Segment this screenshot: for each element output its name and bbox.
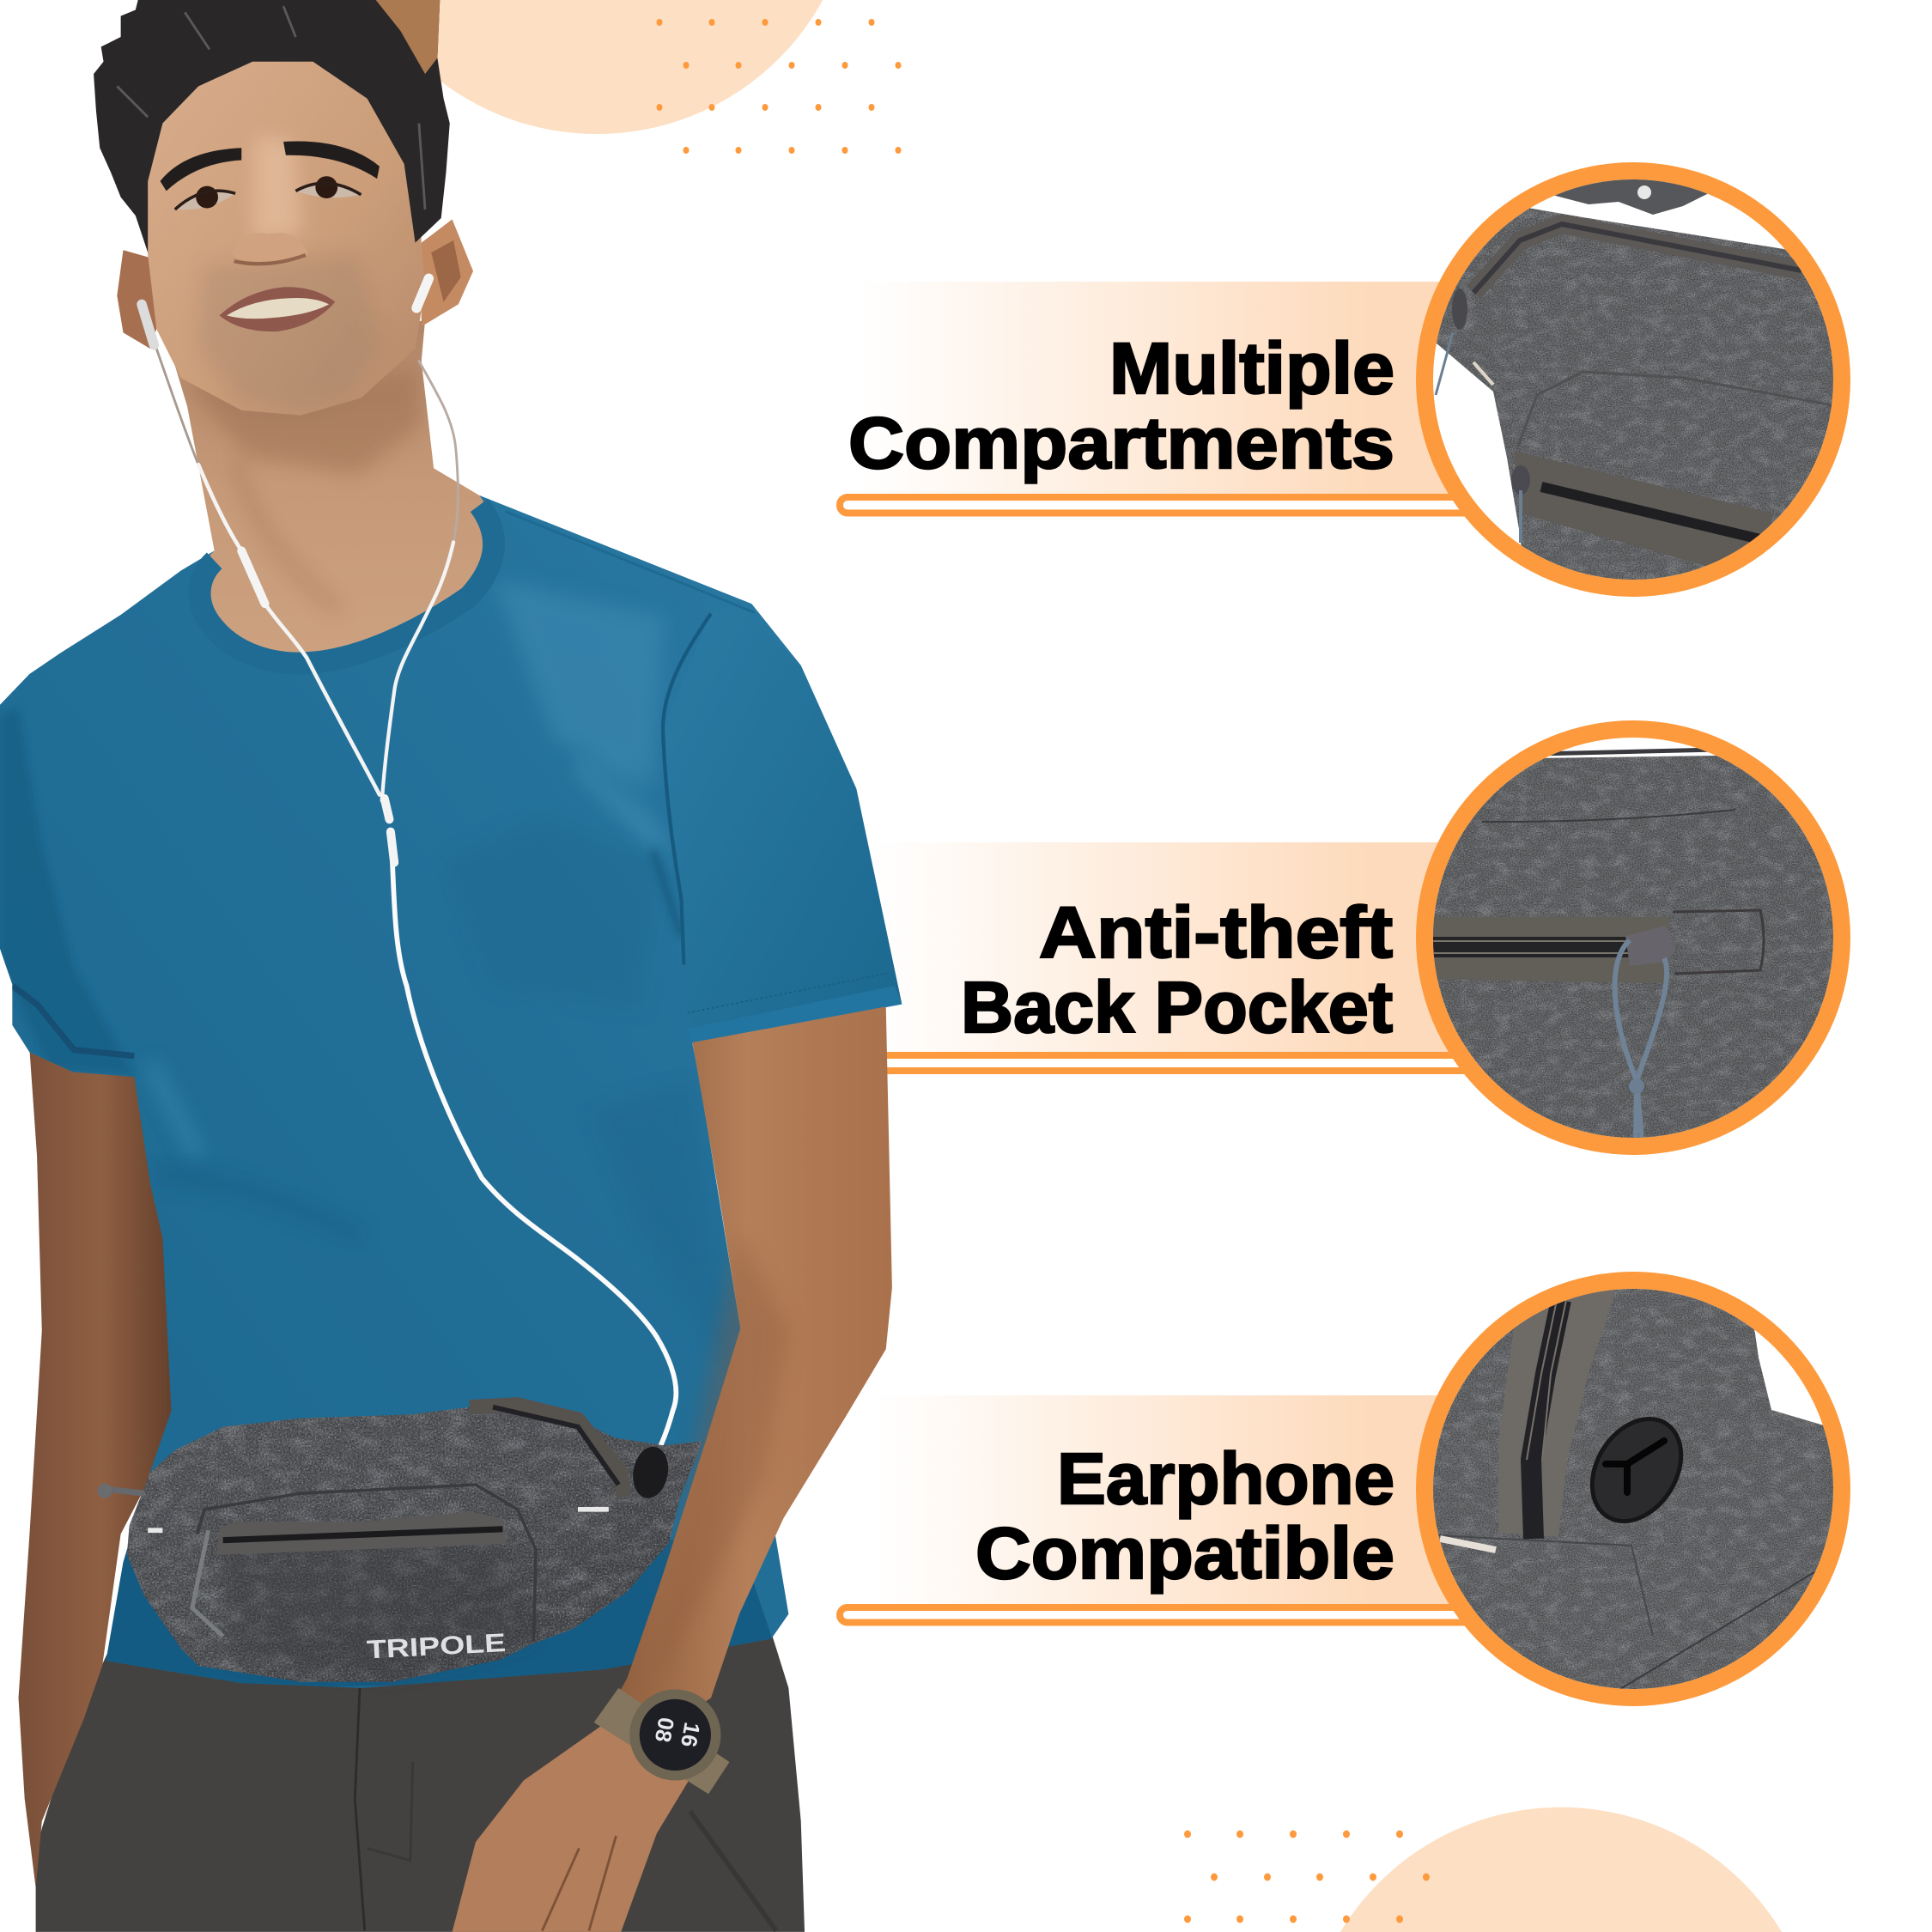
waist bag	[97, 1405, 702, 1682]
shirt shading	[0, 579, 776, 1688]
nose	[232, 233, 308, 262]
ring 3	[1416, 1272, 1850, 1706]
right eye	[295, 184, 361, 197]
decorative peach circle top	[371, 0, 823, 134]
sleeve right	[790, 665, 902, 1007]
right ear	[422, 219, 473, 326]
hair	[94, 0, 450, 252]
main zipper	[470, 1405, 623, 1497]
zip pull cord	[192, 1530, 223, 1637]
heading: Anti-theft Back Pocket	[961, 892, 1393, 1048]
ring 2	[1416, 720, 1850, 1155]
dot grid top	[656, 19, 902, 154]
reflective stitches	[148, 1510, 609, 1530]
face shading and stubble	[197, 252, 382, 413]
heading: Earphone Compatible: Earphone	[1057, 1438, 1394, 1519]
heading: Anti-theft Back Pocket: Back Pocket	[961, 967, 1393, 1048]
bag shading	[222, 1528, 533, 1676]
front pocket zip band	[217, 1512, 507, 1555]
panel: multiple compartments	[840, 162, 1863, 601]
neck	[173, 320, 494, 653]
torso shirt	[0, 481, 912, 1700]
label band 1	[859, 282, 1460, 494]
shirt collar	[200, 505, 494, 663]
right arm	[603, 1006, 892, 1722]
wristwatch	[594, 1688, 729, 1794]
left arm	[19, 1037, 185, 1887]
heading: Earphone Compatible: Compatible	[975, 1513, 1394, 1594]
face	[142, 37, 425, 416]
model wearing the waist bag	[0, 0, 912, 1932]
pants	[36, 1632, 805, 1932]
earphone port	[629, 1444, 672, 1501]
heading: Earphone Compatible	[975, 1438, 1394, 1594]
earphone cable	[142, 278, 676, 1454]
dot grid bottom	[1184, 1831, 1430, 1923]
heading: Multiple Compartments: Compartments	[848, 403, 1394, 483]
decorative peach circle bottom	[1340, 1807, 1782, 1932]
mouth	[219, 287, 335, 331]
close-up photo: back pocket zip	[1433, 738, 1833, 1138]
ring 1	[1416, 162, 1850, 597]
close-up photo: earphone port	[1433, 1289, 1833, 1689]
close-up photo: bag compartments	[1433, 179, 1833, 580]
underline bar 2	[840, 1055, 1527, 1071]
panel: earphone compatible	[840, 1272, 1855, 1709]
pants details	[355, 1688, 776, 1931]
panel: anti-theft back pocket	[840, 720, 1850, 1155]
label band 2	[876, 842, 1460, 1052]
underline bar 1	[840, 497, 1527, 513]
neck shadow	[185, 369, 422, 610]
left ear	[117, 250, 156, 349]
side buckle	[100, 1488, 144, 1493]
heading: Anti-theft Back Pocket: Anti-theft	[1039, 892, 1393, 973]
eyebrows	[161, 148, 241, 191]
label band 3	[876, 1395, 1460, 1604]
front pocket outline	[197, 1485, 536, 1641]
hand	[453, 1725, 692, 1932]
front zip teeth	[223, 1529, 502, 1540]
hair highlight tip	[376, 0, 440, 74]
underline bar 3	[840, 1607, 1527, 1623]
watch face time: 08	[650, 1716, 677, 1744]
heading: Multiple Compartments: Multiple	[1109, 328, 1394, 409]
brand logo: TRIPOLE	[366, 1629, 507, 1664]
teeth	[227, 298, 329, 319]
heading: Multiple Compartments	[848, 328, 1394, 483]
left eye	[175, 191, 235, 210]
wristwatch: 16	[676, 1721, 703, 1749]
